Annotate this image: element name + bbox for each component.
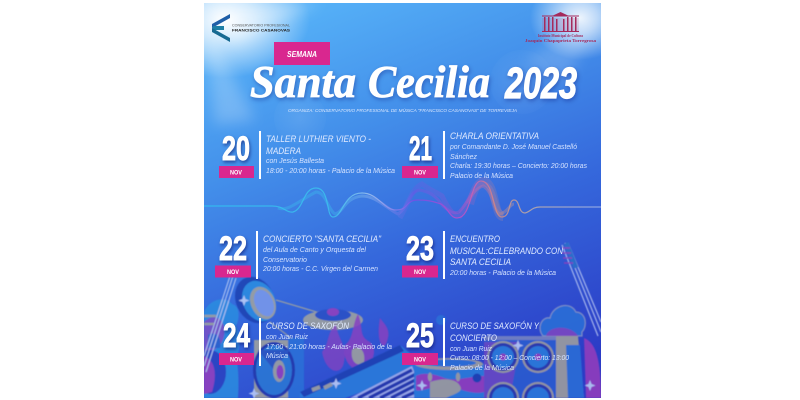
event: 20 nov: NOV (230, 170, 242, 176)
event: 25 nov (402, 317, 570, 372)
drum (234, 276, 317, 339)
event: 23 nov: ENCUENTRO (450, 233, 501, 244)
event: 23 nov: SANTA CECILIA (450, 256, 511, 267)
event: 23 nov: 20:00 horas - Palacio de la Música (449, 268, 556, 277)
left speaker (253, 338, 304, 398)
event: 22 nov: del Aula de Canto y Orquesta del (263, 245, 366, 254)
centre drum (414, 315, 484, 398)
event: 20 nov: TALLER LUTHIER VIENTO - (266, 133, 371, 144)
event: 21 nov: Palacio de la Música (450, 171, 513, 180)
event: 20 nov: con Jesús Ballesta (266, 156, 324, 165)
event: 25 nov: CONCIERTO (450, 332, 498, 343)
organizer line: ORGANIZA: CONSERVATORIO PROFESIONAL DE MÚSICA "FRANCISCO CASANOVAS" DE TORREVIEJA (288, 107, 517, 113)
event: 25 nov: Curso: 08:00 - 12:00 – Concierto: 13:00 (450, 353, 570, 362)
title: 2023 (504, 59, 577, 108)
stars (238, 295, 596, 399)
event: 20 nov: 20 (222, 130, 250, 168)
event: 22 nov: 22 (219, 230, 247, 268)
conservatory logo (212, 14, 291, 42)
right guitar (556, 243, 601, 398)
conservatory logo: CONSERVATORIO PROFESIONAL (232, 24, 290, 28)
event: 21 nov: 21 (409, 130, 432, 168)
event: 21 nov: Sánchez (450, 152, 477, 161)
event: 25 nov: 25 (406, 317, 434, 355)
event: 21 nov: Charla: 19:30 horas – Concierto: 20:00 horas (450, 161, 587, 170)
event: 21 nov: por Comandante D. José Manuel Castelló (449, 142, 577, 151)
flames (322, 314, 388, 371)
event: 24 nov: 24 (223, 317, 250, 355)
event: 22 nov (215, 230, 382, 279)
event: 24 nov: con Juan Ruiz (266, 332, 308, 341)
event: 24 nov: NOV (230, 358, 242, 364)
sound wave (204, 181, 601, 218)
semana badge (274, 42, 330, 65)
event: 23 nov: 23 (406, 230, 434, 268)
event: 21 nov: NOV (414, 170, 426, 176)
event: 22 nov: Conservatorio (263, 255, 307, 264)
title: Cecilia (368, 56, 490, 107)
event: 24 nov: 17:00 - 21:00 horas - Aulas- Palacio de la (266, 342, 392, 351)
event: 22 nov: NOV (227, 270, 239, 276)
event: 23 nov (402, 230, 563, 279)
poster background (204, 3, 601, 398)
municipal institute logo: Instituto Municipal de Cultura (538, 34, 583, 38)
event: 21 nov (402, 130, 587, 180)
event: 24 nov: CURSO DE SAXOFÓN (266, 320, 349, 331)
left cloud and guitar (204, 278, 240, 398)
event: 20 nov: MADERA (266, 145, 301, 156)
conservatory logo: FRANCISCO CASANOVAS (232, 28, 291, 32)
bottom music illustration (194, 243, 601, 400)
event: 22 nov: CONCIERTO "SANTA CECILIA" (263, 233, 382, 244)
title: Santa (250, 56, 356, 107)
municipal institute logo: Joaquín Chapaprieta Torregrosa (525, 38, 597, 43)
event: 21 nov: CHARLA ORIENTATIVA (450, 130, 539, 141)
event: 23 nov: NOV (414, 270, 426, 276)
event: 20 nov: 18:00 - 20:00 horas - Palacio de la Música (266, 166, 395, 175)
cymbal (303, 308, 363, 330)
event: 20 nov (219, 130, 395, 179)
event: 25 nov: con Juan Ruiz (450, 344, 492, 353)
semana badge: SEMANA (287, 49, 317, 59)
event: 25 nov: NOV (414, 358, 426, 364)
municipal institute logo (525, 12, 597, 43)
event: 23 nov: MUSICAL:CELEBRANDO CON (450, 245, 563, 256)
event: 24 nov: Música (266, 351, 288, 360)
keyboard (300, 345, 424, 398)
event: 24 nov (219, 317, 392, 366)
event: 22 nov: 20:00 horas - C.C. Virgen del Carmen (262, 264, 378, 273)
event: 25 nov: CURSO DE SAXOFÓN Y (450, 320, 540, 331)
right speakers (484, 336, 556, 400)
title (250, 56, 577, 108)
right cloud (540, 305, 585, 336)
event: 25 nov: Palacio de la Música (450, 363, 514, 372)
